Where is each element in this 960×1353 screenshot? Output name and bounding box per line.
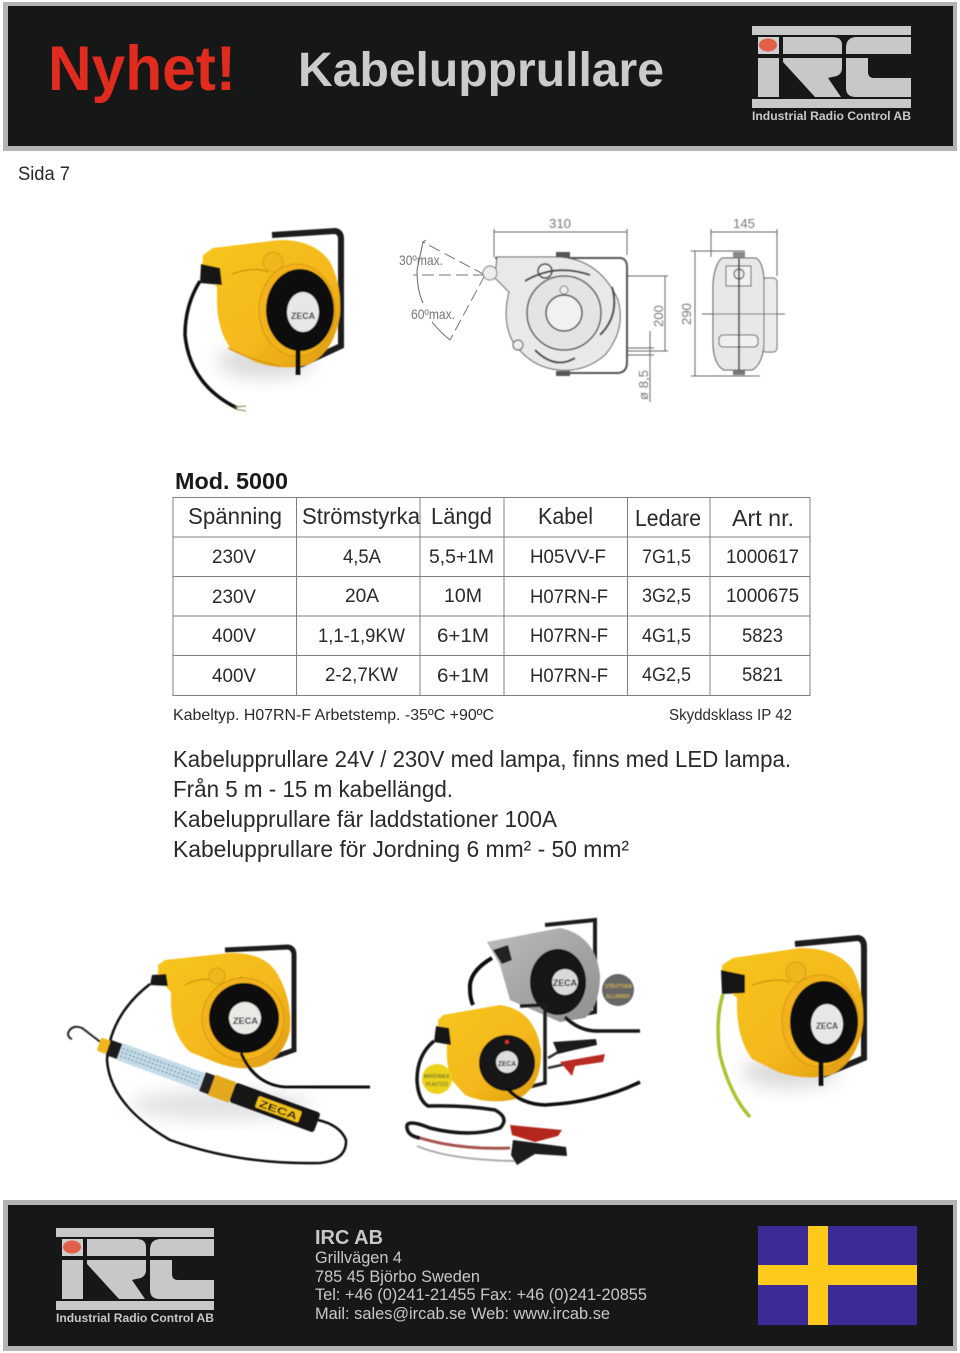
table row 2: H07RN-F xyxy=(530,587,608,608)
specification table xyxy=(173,497,810,696)
table row 2: 20A xyxy=(345,586,379,607)
table row 1: 4,5A xyxy=(343,547,381,568)
icon: Swedish flag xyxy=(758,1226,917,1325)
badge: plastic xyxy=(422,1064,452,1094)
technical drawing: front view xyxy=(483,216,668,402)
dimension: 200: 200 xyxy=(651,305,666,327)
dimension: 145: 145 xyxy=(733,216,755,231)
table header row: Kabel xyxy=(538,503,593,529)
badge: plastic: PLASTICO xyxy=(426,1082,448,1088)
table row 1: H05VV-F xyxy=(530,547,606,568)
table header row: Spänning xyxy=(188,503,282,529)
cables and lower clamps xyxy=(417,1125,567,1165)
table footnote: cable type: Kabeltyp. H07RN-F Arbetstemp. -35ºC +90ºC xyxy=(173,707,494,724)
icon: LED lamp: ZECA xyxy=(257,1099,299,1123)
photo: yellow cable reel: ZECA xyxy=(291,311,315,321)
photo: reel with green-yellow earth cable: ZECA xyxy=(816,1021,838,1031)
table row 4: 5821 xyxy=(742,665,783,686)
dimension: 290: 290 xyxy=(679,303,694,325)
table row 2: 230V xyxy=(212,587,256,608)
contact details: IRC AB xyxy=(315,1227,383,1249)
badge: plastic: MATERIALE xyxy=(424,1074,451,1080)
badge: aluminium: ALLUMINIO xyxy=(606,994,630,1000)
badge: aluminium: STRUTTURA xyxy=(605,984,633,990)
table header row: Art nr. xyxy=(732,505,794,531)
contact details: Tel: +46 (0)241-21455 Fax: +46 (0)241-20855 xyxy=(315,1285,647,1304)
photo: yellow cable reel xyxy=(185,231,341,411)
table row 1 xyxy=(212,547,799,568)
page number: Sida 7 xyxy=(18,164,70,185)
technical drawing: side view xyxy=(679,216,785,376)
grey aluminium reel: ZECA xyxy=(553,978,577,988)
technical drawing: mounting angle xyxy=(399,240,485,340)
description text: Från 5 m - 15 m kabellängd. xyxy=(173,776,453,802)
photo: reel with green-yellow earth cable xyxy=(718,938,864,1117)
contact details xyxy=(315,1227,647,1323)
table row 3: 6+1M xyxy=(437,626,489,647)
table row 4: 6+1M xyxy=(437,666,489,687)
table header row: Strömstyrka xyxy=(302,503,420,529)
logo: IRC header xyxy=(752,26,911,123)
icon: upper black clamp xyxy=(553,1039,597,1054)
label: 30 degrees: 30ºmax. xyxy=(399,252,443,268)
table row 3: 4G1,5 xyxy=(642,626,691,647)
yellow plastic reel: ZECA xyxy=(498,1061,516,1068)
heading: Nyhet!: Nyhet! xyxy=(48,34,236,104)
description text: Kabelupprullare 24V / 230V med lampa, finns med LED lampa. xyxy=(173,746,791,772)
footer banner xyxy=(3,1200,957,1351)
table row 3: 400V xyxy=(212,626,256,647)
table row 3: H07RN-F xyxy=(530,626,608,647)
table row 4: 2-2,7KW xyxy=(325,665,398,686)
photo: reel with LED work lamp xyxy=(68,947,370,1163)
table row 1: 230V xyxy=(212,547,256,568)
table row 2: 10M xyxy=(444,586,482,607)
heading: Kabelupprullare: Kabelupprullare xyxy=(298,44,664,97)
description text: Kabelupprullare fär laddstationer 100A xyxy=(173,806,558,832)
logo: IRC header: Industrial Radio Control AB xyxy=(752,109,911,123)
table header row: Längd xyxy=(431,503,492,529)
table header row xyxy=(188,503,794,531)
table row 4: 4G2,5 xyxy=(642,665,691,686)
photo: reel with LED work lamp: ZECA xyxy=(233,1016,259,1026)
contact details: Mail: sales@ircab.se Web: www.ircab.se xyxy=(315,1304,610,1323)
table row 4: H07RN-F xyxy=(530,666,608,687)
heading: model: Mod. 5000 xyxy=(175,468,288,494)
description text xyxy=(173,746,791,862)
contact details: Grillvägen 4 xyxy=(315,1248,402,1267)
description text: Kabelupprullare för Jordning 6 mm² - 50 mm² xyxy=(173,836,629,862)
table footnote: protection class: Skyddsklass IP 42 xyxy=(669,707,792,724)
table row 3 xyxy=(212,626,783,647)
yellow plastic reel xyxy=(407,1005,640,1138)
dimension: 310: 310 xyxy=(549,216,571,231)
table row 2: 1000675 xyxy=(726,586,799,607)
table row 4 xyxy=(212,665,783,687)
table row 2: 3G2,5 xyxy=(642,586,691,607)
table row 1: 1000617 xyxy=(726,547,799,568)
table row 1: 5,5+1M xyxy=(429,547,494,568)
icon: LED lamp xyxy=(95,1034,321,1134)
icon: upper red clamp xyxy=(560,1054,605,1076)
table row 1: 7G1,5 xyxy=(642,547,691,568)
label: 60 degrees: 60ºmax. xyxy=(411,306,455,322)
logo: IRC footer: Industrial Radio Control AB xyxy=(56,1311,214,1325)
dimension: diameter 8.5: ø 8,5 xyxy=(636,370,651,400)
table row 2 xyxy=(212,586,799,608)
photo: grey and yellow charger reels xyxy=(407,920,640,1165)
badge: aluminium xyxy=(602,974,634,1006)
table row 4: 400V xyxy=(212,666,256,687)
grey aluminium reel xyxy=(470,920,640,1031)
table header row: Ledare xyxy=(635,505,701,531)
table row 3: 5823 xyxy=(742,626,783,647)
logo: IRC footer xyxy=(56,1228,214,1325)
table row 3: 1,1-1,9KW xyxy=(318,626,405,647)
header banner xyxy=(3,2,957,151)
contact details: 785 45 Björbo Sweden xyxy=(315,1267,480,1286)
